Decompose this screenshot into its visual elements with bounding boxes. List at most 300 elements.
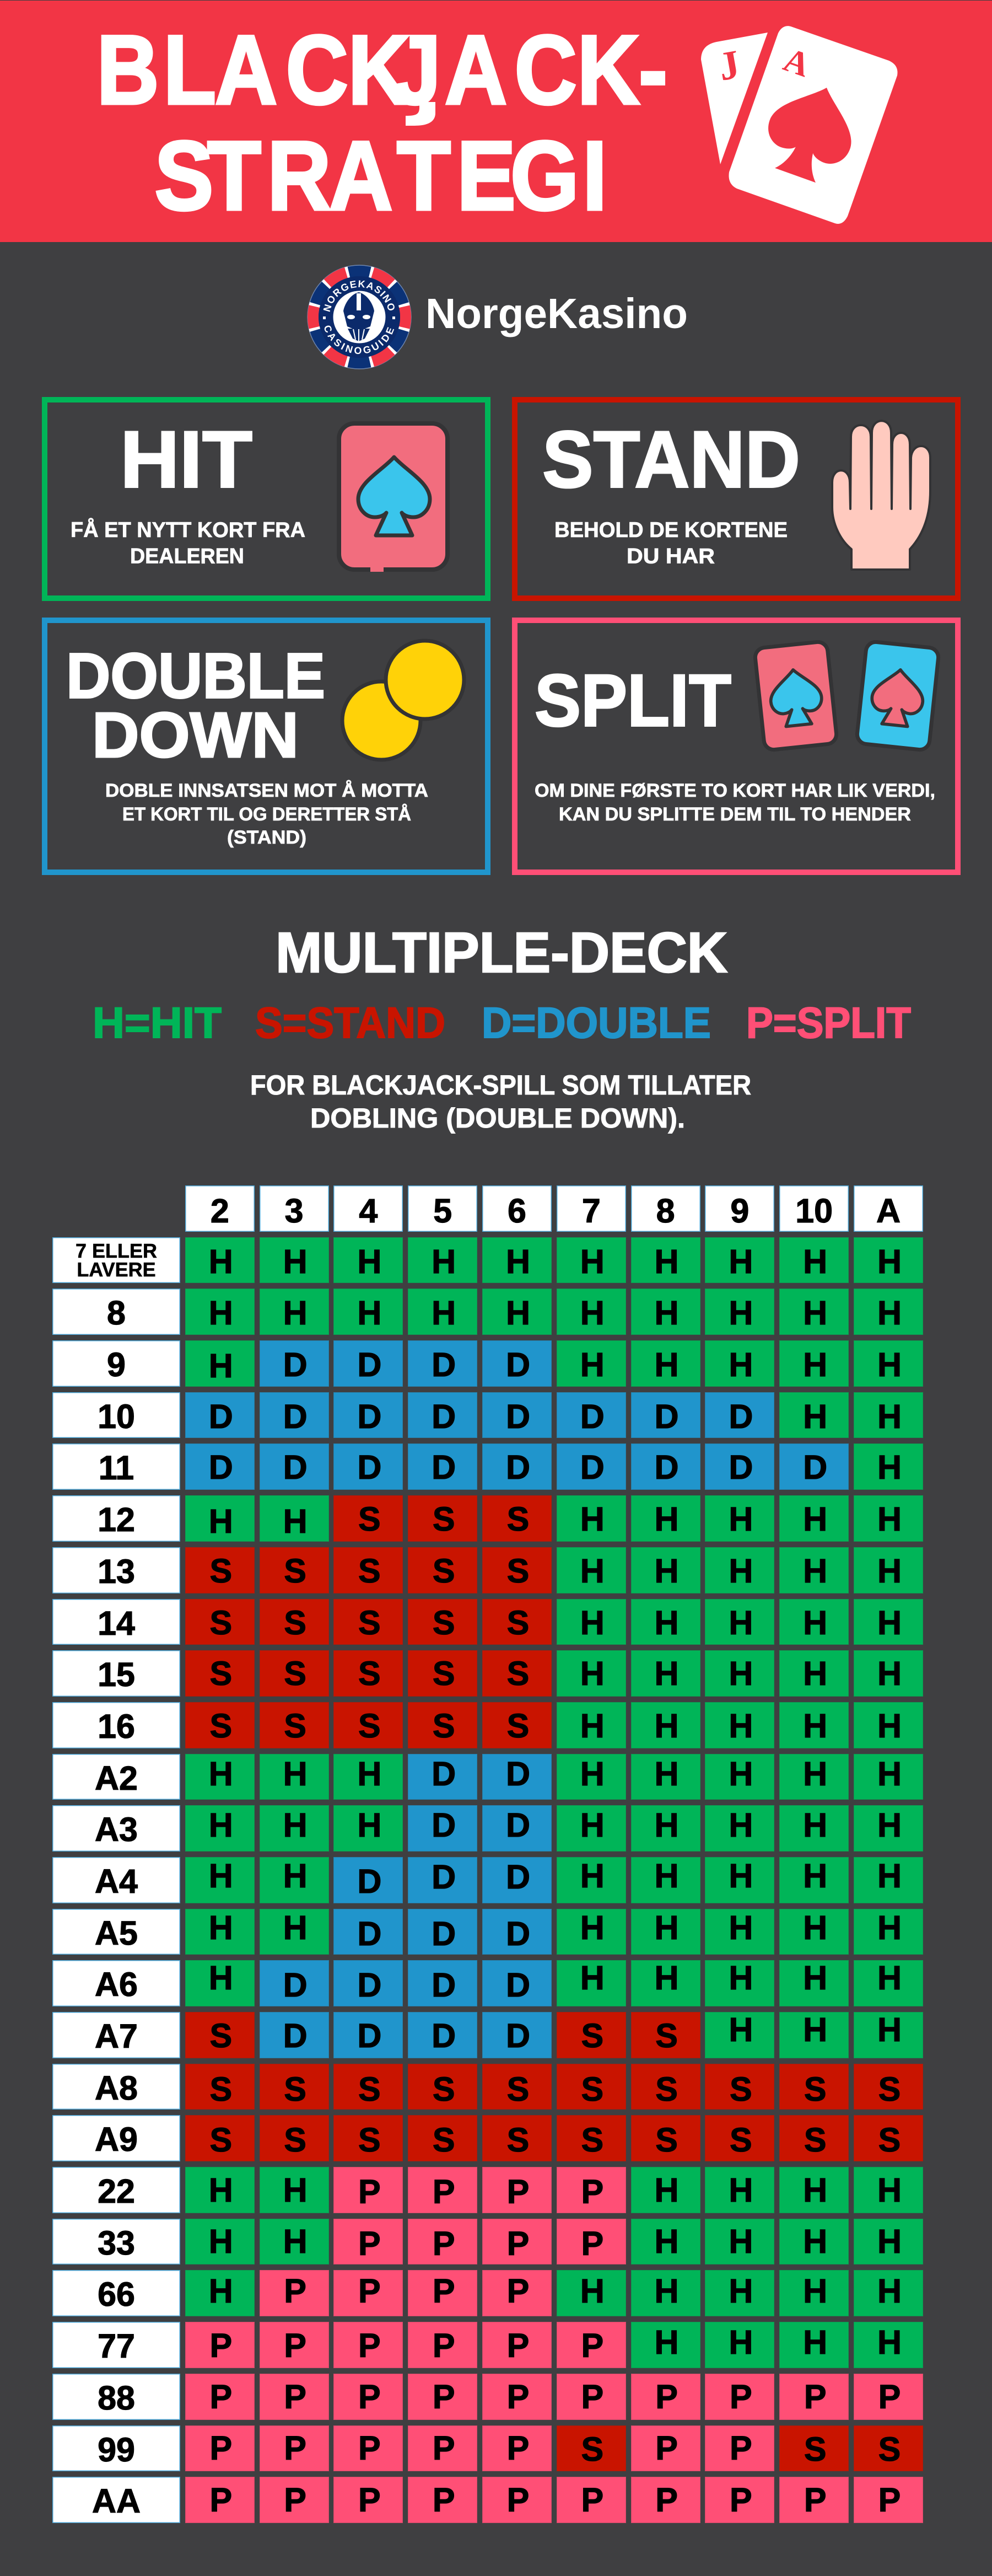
strategy table xyxy=(52,1185,923,2523)
row: 7 eller lavere: H xyxy=(655,1243,679,1280)
icon: pink card with blue spade xyxy=(754,641,837,750)
row: dealer card header: 10 xyxy=(795,1192,833,1230)
row: A4: D xyxy=(506,1858,530,1896)
row: A6: D xyxy=(506,1966,530,2004)
row: 77: P xyxy=(209,2327,232,2364)
row: 77: P xyxy=(507,2327,529,2364)
row: A8: S xyxy=(507,2070,529,2108)
row: 16: S xyxy=(209,1707,232,1745)
row: AA: P xyxy=(730,2481,752,2519)
row: 14 xyxy=(52,1599,923,1645)
row: A4 xyxy=(52,1857,923,1903)
row: 16: S xyxy=(284,1707,306,1745)
row: A3: H xyxy=(803,1806,827,1844)
row: A4: H xyxy=(655,1857,679,1895)
row: 99 xyxy=(52,2425,923,2471)
row: 14: S xyxy=(433,1603,455,1641)
row: 7 eller lavere: H xyxy=(729,1243,753,1280)
row: 7 eller lavere: 7 ELLER xyxy=(76,1239,157,1262)
row: A4: H xyxy=(580,1857,605,1895)
row: 10: H xyxy=(877,1398,902,1435)
row: A7: S xyxy=(209,2017,232,2054)
row: A9: S xyxy=(730,2121,752,2159)
row: 33: H xyxy=(655,2223,679,2260)
row: 13: H xyxy=(655,1552,679,1590)
logo chip xyxy=(307,265,412,369)
row: 10: D xyxy=(655,1398,679,1435)
row: 33: H xyxy=(877,2223,902,2260)
row: 13: S xyxy=(507,1552,529,1590)
row: 12: S xyxy=(433,1500,455,1538)
row: 33 xyxy=(52,2219,923,2264)
row: AA: AA xyxy=(92,2482,141,2520)
row: AA: P xyxy=(284,2481,306,2519)
row: A8: S xyxy=(209,2070,232,2108)
row: A8: S xyxy=(730,2070,752,2108)
text: double description: (STAND) xyxy=(227,827,306,848)
row: 77: 77 xyxy=(98,2327,135,2365)
row: 8 xyxy=(52,1289,923,1335)
row: 16 xyxy=(52,1702,923,1748)
row: 14: S xyxy=(507,1603,529,1641)
row: 77: P xyxy=(284,2327,306,2364)
row: 22: P xyxy=(358,2173,381,2210)
row: A6: D xyxy=(432,1966,456,2004)
row: A6 xyxy=(52,1959,923,2006)
row: 10: D xyxy=(283,1398,308,1435)
row: 11: D xyxy=(580,1448,605,1486)
row: 11: H xyxy=(877,1448,902,1486)
row: 15 xyxy=(52,1650,923,1697)
row: A7: D xyxy=(432,2017,456,2054)
row: 16: S xyxy=(507,1707,529,1745)
row: A8: S xyxy=(358,2070,381,2108)
row: A6: H xyxy=(209,1959,233,1997)
icon: pink card with blue spade xyxy=(339,423,448,572)
row: A7: H xyxy=(803,2011,827,2048)
row: 66: H xyxy=(803,2272,827,2310)
logo chip: CASINOGUIDE xyxy=(324,325,395,354)
row: 13: S xyxy=(284,1552,306,1590)
row: A4: H xyxy=(729,1857,753,1895)
row: 15: S xyxy=(209,1655,232,1692)
row: A9: S xyxy=(209,2121,232,2159)
row: 99: P xyxy=(507,2429,529,2467)
row: 13: H xyxy=(803,1552,827,1590)
row: 15: H xyxy=(803,1655,827,1692)
row: 22: H xyxy=(283,2171,308,2209)
row: 99: 99 xyxy=(98,2430,135,2468)
row: A3: H xyxy=(283,1806,308,1844)
row: A5: H xyxy=(580,1909,605,1946)
row: 33: P xyxy=(507,2225,529,2262)
row: A8: S xyxy=(433,2070,455,2108)
row: A9: A9 xyxy=(95,2121,138,2158)
row: A3: H xyxy=(877,1806,902,1844)
row: 11: D xyxy=(209,1448,233,1486)
row: 88: P xyxy=(878,2378,901,2416)
row: A2: H xyxy=(209,1755,233,1793)
row: A5 xyxy=(52,1909,923,1955)
row: A6: H xyxy=(803,1959,827,1997)
row: 16: S xyxy=(433,1707,455,1745)
row: 77: H xyxy=(729,2323,753,2361)
text: table subtitle: DOBLING (DOUBLE DOWN). xyxy=(310,1103,685,1134)
panel: double down xyxy=(45,620,488,872)
row: 12: S xyxy=(507,1500,529,1538)
row: 15: H xyxy=(655,1655,679,1692)
icon: gold coins xyxy=(342,641,464,760)
row: A5: A5 xyxy=(95,1914,138,1952)
text: hit description xyxy=(71,518,305,568)
text: double description: ET KORT TIL OG DERETTER STÅ xyxy=(122,804,411,825)
panel: split xyxy=(515,620,958,872)
row: A3: H xyxy=(580,1806,605,1844)
logo wordmark: NorgeKasino xyxy=(425,290,688,337)
text: hit description: DEALEREN xyxy=(130,545,244,568)
panel: stand xyxy=(515,400,958,598)
row: A7: H xyxy=(877,2011,902,2048)
row: A5: H xyxy=(283,1909,308,1946)
row: A7: D xyxy=(283,2017,308,2054)
text: stand description xyxy=(554,518,788,568)
row: A7: A7 xyxy=(95,2017,138,2055)
row: 7 eller lavere: H xyxy=(877,1243,902,1280)
row: 12 xyxy=(52,1495,923,1542)
row: A6: H xyxy=(655,1959,679,1997)
row: A2: H xyxy=(580,1755,605,1793)
row: 7 eller lavere: H xyxy=(506,1243,530,1280)
row: A9: S xyxy=(581,2121,603,2159)
row: 77: P xyxy=(581,2327,603,2364)
logo: NorgeKasino xyxy=(307,265,688,369)
row: 9: H xyxy=(877,1346,902,1383)
row: 8: H xyxy=(877,1294,902,1332)
row: 99: P xyxy=(284,2429,306,2467)
row: 11: D xyxy=(432,1448,456,1486)
row: 88 xyxy=(52,2374,923,2420)
row: A3: H xyxy=(655,1806,679,1844)
row: A7: S xyxy=(581,2017,603,2054)
row: 66: 66 xyxy=(98,2276,135,2313)
title: STRATEGI xyxy=(155,121,607,230)
row: 22: 22 xyxy=(98,2172,135,2210)
row: 77: H xyxy=(877,2323,902,2361)
row: A5: H xyxy=(877,1909,902,1946)
row: 33: H xyxy=(729,2223,753,2260)
row: 88: P xyxy=(730,2378,752,2416)
row: A2: H xyxy=(877,1755,902,1793)
row: 22: P xyxy=(507,2173,529,2210)
text: table subtitle xyxy=(250,1070,751,1134)
row: 9 xyxy=(52,1340,923,1387)
row: 33: P xyxy=(581,2225,603,2262)
panel: hit xyxy=(45,400,488,598)
row: 7 eller lavere: LAVERE xyxy=(77,1258,156,1281)
row: 8: H xyxy=(580,1294,605,1332)
row: 66: P xyxy=(507,2272,529,2310)
row: 13: H xyxy=(877,1552,902,1590)
row: 66: P xyxy=(433,2272,455,2310)
row: dealer card header: 5 xyxy=(433,1192,452,1230)
row: 99: P xyxy=(730,2429,752,2467)
row: 9: H xyxy=(803,1346,827,1383)
row: AA: P xyxy=(581,2481,603,2519)
row: 13 xyxy=(52,1547,923,1593)
row: 8: H xyxy=(803,1294,827,1332)
row: dealer card header: 2 xyxy=(211,1192,229,1230)
row: A8: S xyxy=(581,2070,603,2108)
row: 66: H xyxy=(729,2272,753,2310)
row: 12: H xyxy=(209,1502,233,1540)
row: A7: D xyxy=(357,2017,381,2054)
row: 99: P xyxy=(655,2429,678,2467)
row: A5: H xyxy=(729,1909,753,1946)
icon: jack and ace cards xyxy=(701,26,897,224)
row: A9: S xyxy=(358,2121,381,2159)
row: 22: H xyxy=(803,2171,827,2209)
row: 14: H xyxy=(655,1603,679,1641)
row: 11: D xyxy=(655,1448,679,1486)
text: split description xyxy=(535,780,935,825)
row: 66: H xyxy=(877,2272,902,2310)
row: A8 xyxy=(52,2064,923,2110)
row: 10: D xyxy=(357,1398,381,1435)
row: 7 eller lavere: H xyxy=(803,1243,827,1280)
row: A4: H xyxy=(209,1857,233,1895)
row: 13: S xyxy=(433,1552,455,1590)
row: 10: H xyxy=(803,1398,827,1435)
legend: H=HIT xyxy=(93,998,222,1047)
row: 12: S xyxy=(358,1500,381,1538)
row: dealer card header: 4 xyxy=(359,1192,378,1230)
row: A6: H xyxy=(877,1959,902,1997)
row: 88: P xyxy=(433,2378,455,2416)
row: 14: 14 xyxy=(98,1604,135,1642)
row: 15: H xyxy=(580,1655,605,1692)
row: 13: S xyxy=(358,1552,381,1590)
row: 99: P xyxy=(358,2429,381,2467)
row: 8: H xyxy=(357,1294,381,1332)
row: A7: D xyxy=(506,2017,530,2054)
row: A8: S xyxy=(804,2070,827,2108)
row: A8: S xyxy=(655,2070,678,2108)
row: 16: 16 xyxy=(98,1708,135,1745)
row: 77 xyxy=(52,2322,923,2368)
row: 7 eller lavere: H xyxy=(432,1243,456,1280)
text: stand description: BEHOLD DE KORTENE xyxy=(554,518,788,542)
row: dealer card header: A xyxy=(876,1192,901,1230)
row: 66: H xyxy=(580,2272,605,2310)
icon: jack and ace cards: A xyxy=(779,41,815,84)
text: double description xyxy=(105,780,428,848)
row: 12: H xyxy=(580,1500,605,1538)
row: A6: D xyxy=(357,1966,381,2004)
row: A3: D xyxy=(506,1806,530,1844)
row: A6: D xyxy=(283,1966,308,2004)
row: A5: D xyxy=(506,1915,530,1952)
row: 88: P xyxy=(209,2378,232,2416)
row: 10: D xyxy=(209,1398,233,1435)
row: A7 xyxy=(52,2011,923,2058)
row: 10: D xyxy=(506,1398,530,1435)
row: 11: D xyxy=(506,1448,530,1486)
row: A9: S xyxy=(284,2121,306,2159)
text: table subtitle: FOR BLACKJACK-SPILL SOM TILLATER xyxy=(250,1070,751,1101)
row: 15: S xyxy=(284,1655,306,1692)
legend: S=STAND xyxy=(255,998,445,1047)
row: 8: H xyxy=(655,1294,679,1332)
row: 9: 9 xyxy=(107,1346,126,1383)
row: 11 xyxy=(52,1443,923,1490)
row: AA: P xyxy=(507,2481,529,2519)
row: 77: H xyxy=(655,2323,679,2361)
row: 11: D xyxy=(283,1448,308,1486)
row: A2: H xyxy=(803,1755,827,1793)
row: 7 eller lavere xyxy=(52,1237,923,1283)
row: 22: H xyxy=(655,2171,679,2209)
row: AA: P xyxy=(433,2481,455,2519)
row: 15: S xyxy=(507,1655,529,1692)
row: A3: D xyxy=(432,1806,456,1844)
text: double description: DOBLE INNSATSEN MOT Å MOTTA xyxy=(105,780,428,801)
heading: double down: DOWN xyxy=(92,699,299,771)
row: A3: H xyxy=(729,1806,753,1844)
heading: double down: DOUBLE xyxy=(66,640,325,711)
row: 8: 8 xyxy=(107,1294,126,1332)
row: 10: D xyxy=(729,1398,753,1435)
row: 33: H xyxy=(283,2223,308,2260)
row: 15: S xyxy=(358,1655,381,1692)
row: dealer card header xyxy=(185,1185,923,1232)
row: 66: H xyxy=(209,2272,233,2310)
row: A2: H xyxy=(655,1755,679,1793)
legend: P=SPLIT xyxy=(746,998,911,1047)
title: BLACKJACK- xyxy=(96,15,667,125)
row: 99: S xyxy=(878,2430,901,2468)
row: 8: H xyxy=(209,1294,233,1332)
row: 10: D xyxy=(580,1398,605,1435)
row: 77: P xyxy=(358,2327,381,2364)
row: 15: H xyxy=(729,1655,753,1692)
row: 11: D xyxy=(729,1448,753,1486)
row: A3 xyxy=(52,1805,923,1852)
row: 16: H xyxy=(655,1707,679,1745)
row: 9: D xyxy=(432,1346,456,1383)
heading: stand: STAND xyxy=(542,415,800,504)
row: AA: P xyxy=(358,2481,381,2519)
header banner xyxy=(0,1,992,242)
row: 99: P xyxy=(433,2429,455,2467)
text: hit description: FÅ ET NYTT KORT FRA xyxy=(71,518,305,542)
row: AA xyxy=(52,2477,923,2523)
row: 99: S xyxy=(804,2430,827,2468)
row: 14: H xyxy=(877,1603,902,1641)
row: A8: A8 xyxy=(95,2069,138,2107)
row: 22: H xyxy=(729,2171,753,2209)
row: A6: H xyxy=(729,1959,753,1997)
row: A9: S xyxy=(878,2121,901,2159)
row: 22: H xyxy=(877,2171,902,2209)
legend xyxy=(93,998,911,1047)
row: 12: H xyxy=(655,1500,679,1538)
row: 66 xyxy=(52,2270,923,2316)
row: A7: H xyxy=(729,2011,753,2048)
row: 22: P xyxy=(433,2173,455,2210)
row: 22: H xyxy=(209,2171,233,2209)
row: 88: P xyxy=(358,2378,381,2416)
row: A9: S xyxy=(433,2121,455,2159)
row: 88: P xyxy=(655,2378,678,2416)
row: 22 xyxy=(52,2167,923,2213)
row: A2 xyxy=(52,1754,923,1800)
row: A5: H xyxy=(655,1909,679,1946)
heading: double down xyxy=(66,640,325,771)
heading: multiple-deck: MULTIPLE-DECK xyxy=(276,921,727,984)
row: 14: S xyxy=(284,1603,306,1641)
row: AA: P xyxy=(209,2481,232,2519)
row: 16: S xyxy=(358,1707,381,1745)
row: A5: H xyxy=(803,1909,827,1946)
row: 9: H xyxy=(580,1346,605,1383)
text: split description: KAN DU SPLITTE DEM TIL TO HENDER xyxy=(559,804,911,825)
row: A8: S xyxy=(284,2070,306,2108)
row: 15: H xyxy=(877,1655,902,1692)
row: 14: H xyxy=(580,1603,605,1641)
row: 12: H xyxy=(729,1500,753,1538)
row: 7 eller lavere: H xyxy=(209,1243,233,1280)
text: split description: OM DINE FØRSTE TO KORT HAR LIK VERDI, xyxy=(535,780,935,801)
row: 10 xyxy=(52,1392,923,1438)
row: 8: H xyxy=(729,1294,753,1332)
row: A9: S xyxy=(655,2121,678,2159)
row: 66: P xyxy=(284,2272,306,2310)
icon: blue card with pink spade xyxy=(856,641,939,750)
heading: hit: HIT xyxy=(120,415,252,504)
row: 22: P xyxy=(581,2173,603,2210)
icon: jack and ace cards: J xyxy=(715,42,743,90)
row: 13: H xyxy=(729,1552,753,1590)
row: 16: H xyxy=(877,1707,902,1745)
row: dealer card header: 7 xyxy=(582,1192,601,1230)
row: 10: D xyxy=(432,1398,456,1435)
row: 9: D xyxy=(283,1346,308,1383)
row: dealer card header: 8 xyxy=(656,1192,675,1230)
row: 7 eller lavere: H xyxy=(283,1243,308,1280)
row: 7 eller lavere: H xyxy=(357,1243,381,1280)
row: 11: 11 xyxy=(99,1449,134,1486)
row: 88: 88 xyxy=(98,2379,135,2417)
row: 8: H xyxy=(432,1294,456,1332)
row: A4: H xyxy=(803,1857,827,1895)
row: A6: A6 xyxy=(95,1966,138,2003)
row: 15: S xyxy=(433,1655,455,1692)
row: A2: D xyxy=(432,1755,456,1793)
row: 99: S xyxy=(581,2430,603,2468)
row: 10: 10 xyxy=(98,1398,135,1435)
row: 88: P xyxy=(507,2378,529,2416)
row: 15: 15 xyxy=(98,1656,135,1693)
title xyxy=(96,15,667,230)
row: A4: H xyxy=(283,1857,308,1895)
row: A9 xyxy=(52,2115,923,2161)
row: 11: D xyxy=(357,1448,381,1486)
row: 13: S xyxy=(209,1552,232,1590)
row: A6: H xyxy=(580,1959,605,1997)
row: 11: D xyxy=(803,1448,827,1486)
row: 12: H xyxy=(283,1502,308,1540)
row: A4: A4 xyxy=(95,1863,138,1900)
